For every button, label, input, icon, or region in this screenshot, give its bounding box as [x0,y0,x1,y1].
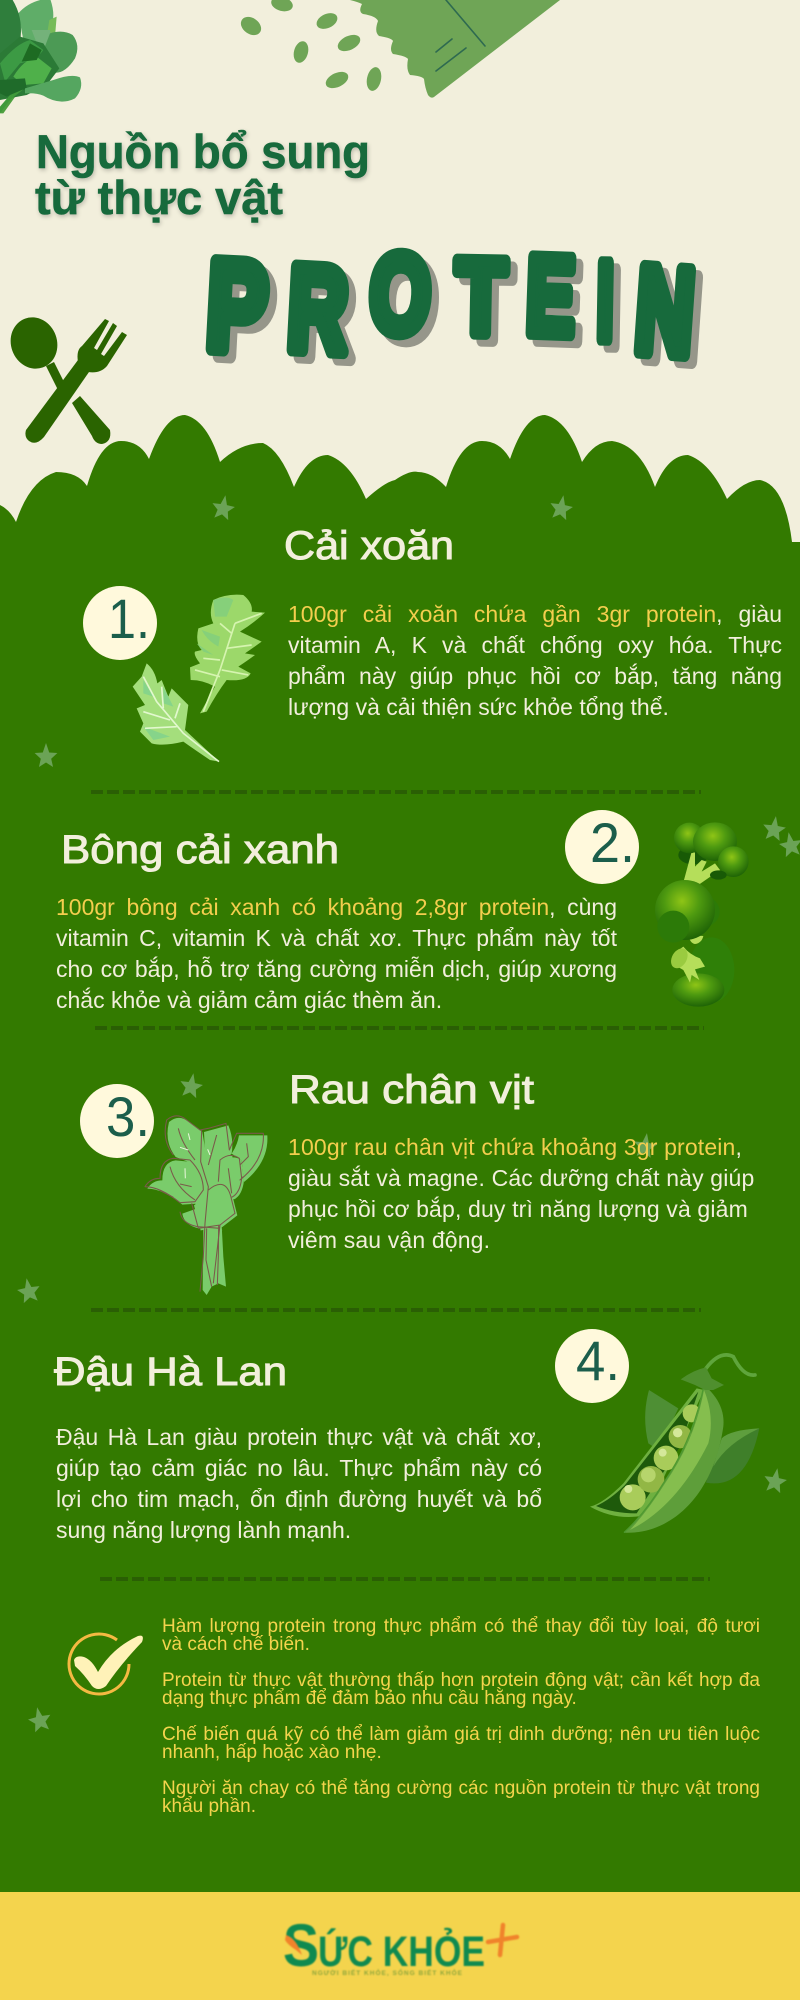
notes block: Chế biến quá kỹ có thể làm giảm giá trị dinh dưỡng; nên ưu tiên luộc [162,1724,760,1745]
PROTEIN heading: O [367,231,434,359]
logo [283,1912,517,1979]
PROTEIN heading: N [631,240,699,381]
notes block: Người ăn chay có thể tăng cường các nguồn protein từ thực vật trong [162,1778,760,1799]
notes block: khẩu phần. [162,1796,256,1817]
notes block: dạng thực phẩm để đảm bảo nhu cầu hằng ngày. [162,1688,577,1709]
PROTEIN heading: O [374,238,441,366]
section 1 text: vitamin A, K và chất chống oxy hóa. Thực [288,632,782,658]
PROTEIN heading: T [455,238,507,357]
notes block [162,1616,760,1817]
number badge 3 [80,1084,154,1158]
notes block: và cách chế biến. [162,1634,310,1655]
decorative stars [15,493,800,1733]
section 4 text: lợi cho tim mạch, ổn định đường huyết và bổ [56,1486,542,1512]
number badge 2 [565,810,639,884]
number badge 3: 3. [106,1085,150,1148]
notes block: nhanh, hấp hoặc xào nhẹ. [162,1742,382,1763]
PROTEIN heading [204,231,706,388]
green background panel [0,415,800,1892]
number badge 1: 1. [108,587,150,650]
section 1 text [288,601,782,720]
illustration: spinach corner [0,0,81,113]
PROTEIN heading: I [596,239,615,363]
section 3 text [288,1134,754,1253]
section 2 text [56,894,617,1013]
icon: check mark [69,1634,143,1694]
number badge 1 [83,586,157,660]
PROTEIN heading: P [211,242,278,386]
illustration: broccoli [655,822,749,1007]
logo: S [283,1912,319,1979]
section 1 text: lượng và cải thiện sức khỏe tổng thể. [288,694,669,720]
section 3 text: phục hồi cơ bắp, duy trì năng lượng và giảm [288,1196,748,1222]
section 4 text: Đậu Hà Lan giàu protein thực vật và chất xơ, [56,1424,542,1450]
section 4 text: sung năng lượng lành mạnh. [56,1517,351,1543]
illustration: pea pod [590,1355,759,1533]
PROTEIN heading: E [524,233,577,358]
section 4 text: giúp tạo cảm giác no lâu. Thực phẩm này có [56,1455,542,1481]
PROTEIN heading: T [462,245,514,364]
dividers [91,792,710,1579]
section 1 text: phẩm này giúp phục hồi cơ bắp, tăng năng [288,663,782,689]
number badge 4: 4. [576,1329,620,1392]
PROTEIN heading: E [531,240,584,365]
section 4 text [56,1424,542,1543]
section 2 text: vitamin C, vitamin K và chất xơ. Thực phẩm này tốt [56,925,617,951]
seeds [237,0,383,92]
section 1 heading: Cải xoăn [284,524,454,568]
section 4 heading: Đậu Hà Lan [54,1350,287,1394]
section 3 text: 100gr rau chân vịt chứa khoảng 3gr protein, [288,1134,742,1160]
section 3 text: giàu sắt và magne. Các dưỡng chất này giúp [288,1165,754,1191]
PROTEIN heading: P [204,235,271,379]
PROTEIN heading: R [292,248,358,385]
section 2 heading: Bông cải xanh [61,828,339,872]
illustration: kale [133,595,265,762]
section 3 heading: Rau chân vịt [289,1068,534,1112]
PROTEIN heading: N [638,247,706,388]
section 2 text: chắc khỏe và giảm cảm giác thèm ăn. [56,987,442,1013]
title: Nguồn bổ sung [36,125,370,178]
section 1 text: 100gr cải xoăn chứa gần 3gr protein, giàu [288,601,782,627]
footer band [0,1892,800,2000]
notes block: Protein từ thực vật thường thấp hơn protein động vật; cần kết hợp đa [162,1670,760,1691]
title [35,125,370,224]
PROTEIN heading: I [603,246,622,370]
number badge 2: 2. [590,811,635,874]
icon: spoon and fork [3,311,127,444]
illustration: spinach bunch [145,1116,267,1295]
logo: ỨC KHỎE [318,1927,485,1976]
illustration: torn packet [350,0,560,98]
logo: NGƯỜI BIẾT KHỎE, SỐNG BIẾT KHỎE [312,1967,463,1977]
notes block: Hàm lượng protein trong thực phẩm có thể thay đổi tùy loại, độ tươi [162,1616,760,1637]
title: từ thực vật [35,171,283,224]
section 3 text: viêm sau vận động. [288,1227,490,1253]
PROTEIN heading: R [285,241,351,378]
section 2 text: 100gr bông cải xanh có khoảng 2,8gr protein, cùng [56,894,617,920]
number badge 4 [555,1329,629,1403]
section 2 text: cho cơ bắp, hỗ trợ tăng cường miễn dịch, giúp xương [56,956,617,982]
